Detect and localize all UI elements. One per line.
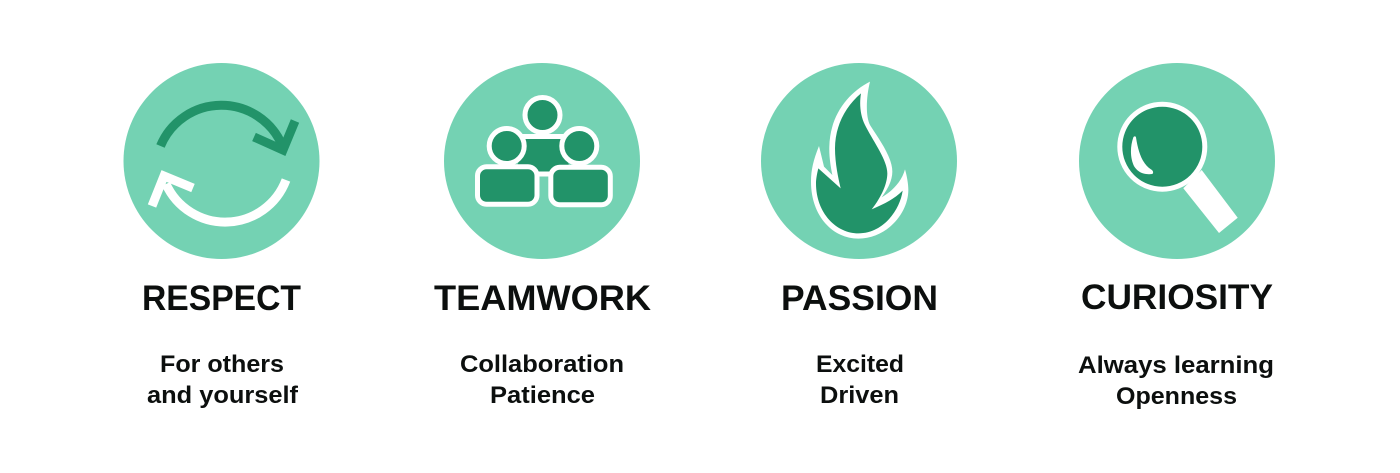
icon: magnifying glass — [1079, 63, 1275, 259]
heading: passion: PASSION — [781, 279, 938, 318]
heading: respect: RESPECT — [142, 279, 301, 318]
text: passion description — [816, 351, 904, 409]
icon: team of three people — [444, 63, 640, 259]
text: teamwork description: Patience — [490, 382, 595, 409]
heading: curiosity: CURIOSITY — [1081, 278, 1273, 317]
text: respect description: and yourself — [147, 382, 299, 409]
text: curiosity description: Always learning — [1078, 352, 1274, 379]
heading: teamwork: TEAMWORK — [434, 279, 651, 318]
text: curiosity description — [1078, 352, 1274, 410]
text: teamwork description — [460, 351, 624, 409]
text: passion description: Driven — [820, 382, 899, 409]
text: respect description: For others — [160, 351, 284, 378]
panel: teamwork — [434, 63, 651, 409]
panel: respect — [124, 63, 320, 409]
text: respect description — [147, 351, 299, 409]
text: teamwork description: Collaboration — [460, 351, 624, 378]
text: passion description: Excited — [816, 351, 904, 378]
panel: curiosity — [1078, 63, 1275, 410]
icon: flame — [761, 63, 957, 259]
panel: passion — [761, 63, 957, 409]
text: curiosity description: Openness — [1116, 383, 1237, 410]
icon: circular arrows — [124, 63, 320, 259]
